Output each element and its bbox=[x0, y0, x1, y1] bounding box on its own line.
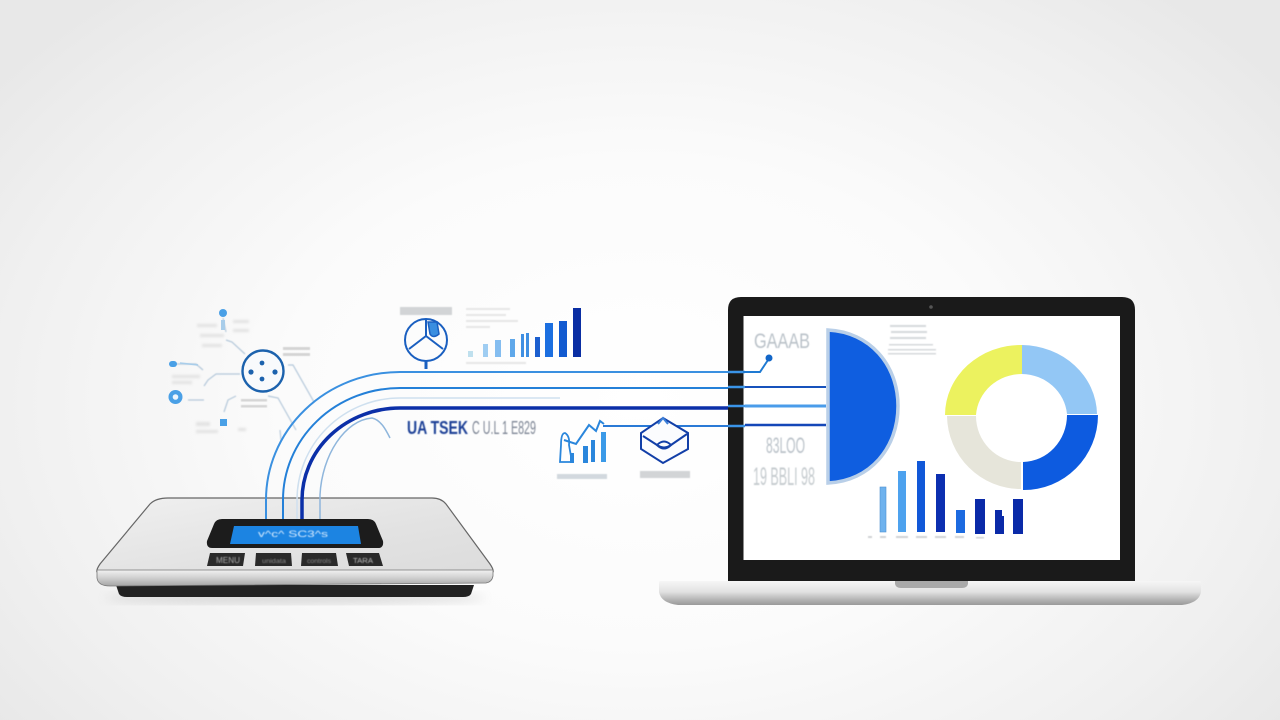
screen labels left: 83LOO bbox=[766, 433, 805, 458]
hexagon icon bbox=[641, 418, 688, 463]
flow line 4 bbox=[603, 425, 745, 427]
center caption text: C U.L 1 E829 bbox=[472, 418, 536, 438]
center caption text: UA TSEK bbox=[407, 418, 468, 438]
laptop hinge notch bbox=[895, 581, 968, 588]
laptop base bbox=[659, 581, 1201, 605]
device display screen bbox=[230, 526, 361, 544]
network icons cluster bbox=[168, 309, 314, 440]
faint labels bbox=[172, 320, 249, 433]
device top surface bbox=[97, 498, 493, 572]
thin light arc bbox=[320, 418, 390, 519]
device display bezel bbox=[207, 519, 383, 548]
laptop bezel bbox=[728, 297, 1135, 581]
device base bbox=[116, 585, 474, 597]
donut chart bbox=[945, 345, 1098, 490]
screen labels left: 19 BBLI 98 bbox=[753, 463, 815, 491]
small blue dots bbox=[168, 309, 227, 426]
device buttons bbox=[207, 553, 383, 566]
flow lines from device to laptop bbox=[266, 372, 745, 519]
device front edge bbox=[97, 570, 493, 586]
device buttons: unidata bbox=[262, 559, 287, 565]
growth chart icon bbox=[560, 421, 606, 463]
laptop bbox=[659, 297, 1201, 605]
donut segment: beige bbox=[947, 416, 1021, 489]
scale device bbox=[97, 498, 493, 604]
bar axis labels bbox=[868, 536, 984, 538]
device display screen: v^c^ SC3^s bbox=[258, 529, 329, 539]
donut segment: blue bbox=[1023, 415, 1098, 490]
flow line 2 bbox=[283, 388, 745, 519]
flow line 3 dark bbox=[302, 408, 745, 519]
device buttons: controls bbox=[307, 559, 331, 565]
laptop screen bbox=[744, 316, 1120, 560]
hexagon icon label bbox=[640, 471, 690, 478]
screen labels left: GAAAB bbox=[754, 330, 810, 353]
flow line 1 bbox=[266, 372, 745, 519]
donut segment: light blue bbox=[1022, 345, 1097, 414]
hub circle icon bbox=[242, 350, 284, 392]
device buttons: MENU bbox=[216, 556, 240, 565]
top mini bar chart bbox=[468, 308, 581, 357]
top mini icon: circle bbox=[405, 319, 447, 369]
screen caption block bbox=[888, 325, 936, 354]
top chart captions bbox=[466, 308, 526, 364]
half disc chart bbox=[828, 330, 898, 483]
growth icon label bbox=[557, 474, 607, 479]
lines redrawn over laptop bezel bbox=[728, 354, 826, 426]
center caption text bbox=[407, 418, 536, 438]
donut segment: yellow bbox=[945, 345, 1022, 415]
faint inner arc bbox=[297, 398, 560, 519]
screen bar chart bbox=[868, 461, 1023, 538]
connector lines bbox=[176, 318, 314, 440]
screen labels left bbox=[753, 330, 815, 491]
device buttons: TARA bbox=[353, 558, 373, 565]
top label bbox=[400, 307, 452, 315]
camera bbox=[929, 305, 933, 309]
